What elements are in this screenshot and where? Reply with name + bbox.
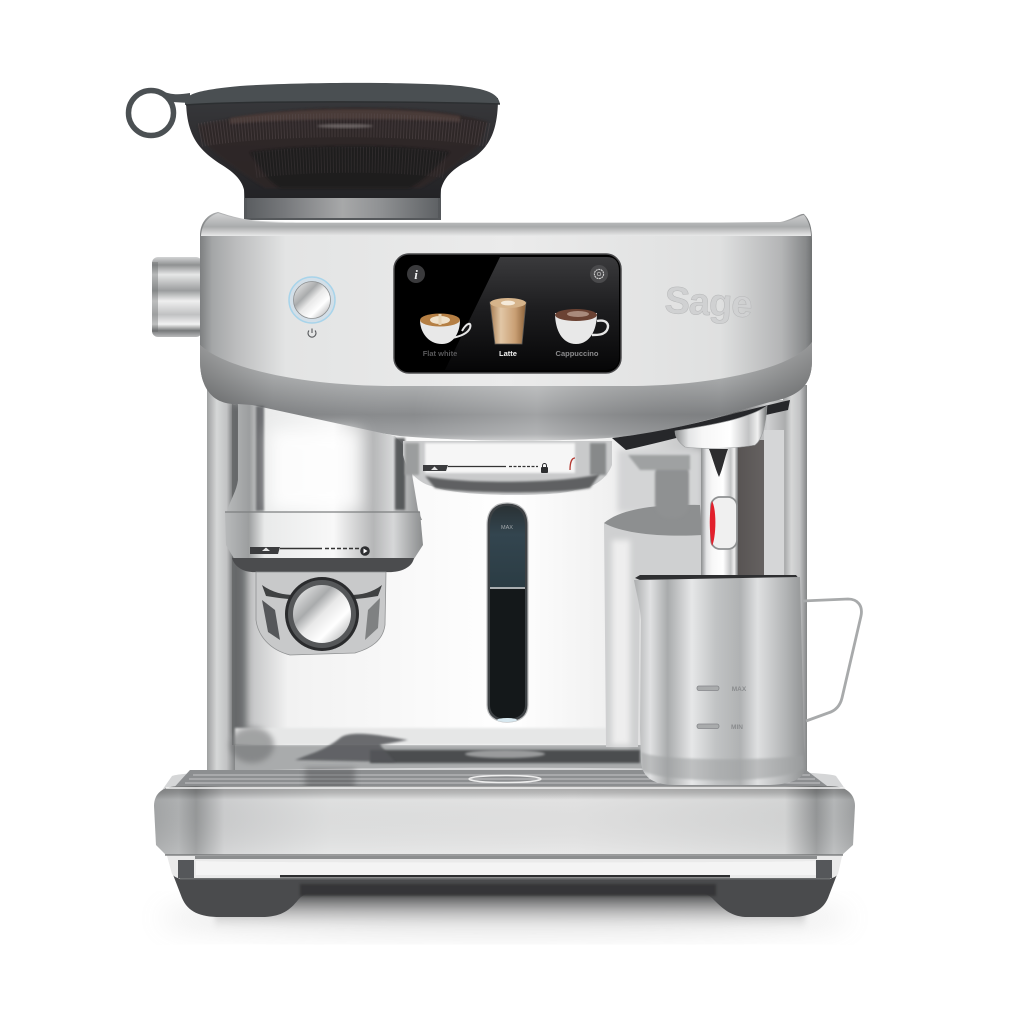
bean hopper bbox=[128, 83, 500, 220]
flat white label: Flat white bbox=[423, 349, 457, 358]
milk jug bbox=[634, 575, 861, 785]
drip tray front bbox=[154, 786, 855, 855]
flat white cup bbox=[420, 314, 470, 344]
steam head cap bbox=[675, 406, 767, 448]
screen glare bbox=[445, 257, 619, 370]
portafilter knob bbox=[285, 577, 359, 651]
settings icon bbox=[590, 265, 608, 283]
left and right columns bbox=[207, 385, 807, 780]
latte label: Latte bbox=[499, 349, 517, 358]
dark underside wedge bbox=[612, 400, 790, 450]
tamper scale bbox=[423, 464, 548, 473]
tamper head bbox=[403, 441, 612, 495]
base feet and plinth bbox=[172, 872, 838, 934]
jug opening bbox=[635, 575, 800, 580]
jug max mark bbox=[697, 686, 747, 693]
latte glass bbox=[490, 298, 526, 344]
ground shadow bbox=[160, 906, 850, 930]
dose collar dark lip bbox=[232, 558, 414, 572]
coffee beans and ribbing bbox=[198, 108, 488, 188]
power button bbox=[289, 277, 335, 323]
info icon bbox=[407, 265, 425, 283]
sage logo: Sage bbox=[664, 280, 753, 326]
jug max mark: MAX bbox=[732, 686, 747, 693]
water tank window bbox=[487, 503, 528, 722]
hopper bowl bbox=[186, 98, 498, 198]
portafilter bbox=[256, 572, 386, 655]
power icon bbox=[308, 328, 316, 337]
base reflection bbox=[230, 727, 645, 773]
jug min mark: MIN bbox=[731, 724, 743, 731]
steam wand bbox=[701, 447, 738, 582]
cappuccino label: Cappuccino bbox=[556, 349, 599, 358]
max water label: MAX bbox=[501, 525, 513, 531]
steam dial with red marker bbox=[710, 497, 737, 549]
cappuccino cup bbox=[555, 309, 608, 344]
head lower band bbox=[200, 342, 812, 441]
touch screen bbox=[393, 254, 622, 374]
info icon: i bbox=[414, 267, 418, 282]
side dial bbox=[152, 257, 202, 337]
hopper lid bbox=[185, 83, 500, 105]
shadow under the arch bbox=[215, 892, 805, 934]
lid ring tab bbox=[128, 90, 190, 136]
chute upper chrome bbox=[226, 404, 422, 520]
machine head panel bbox=[200, 212, 812, 441]
jug handle bbox=[802, 599, 861, 721]
jug min mark bbox=[697, 724, 743, 731]
interior back panel bbox=[232, 400, 785, 745]
chrome strip bbox=[166, 852, 843, 880]
hopper collar bbox=[244, 180, 441, 220]
grinder chute bbox=[225, 404, 423, 572]
head top band bbox=[201, 213, 811, 236]
drip tray grate bbox=[158, 768, 850, 796]
rear jug reflection bbox=[604, 455, 702, 747]
chute collar bbox=[225, 512, 423, 562]
jug body bbox=[634, 577, 806, 785]
grinder scale bbox=[250, 546, 370, 556]
interior reflections bbox=[232, 405, 784, 735]
